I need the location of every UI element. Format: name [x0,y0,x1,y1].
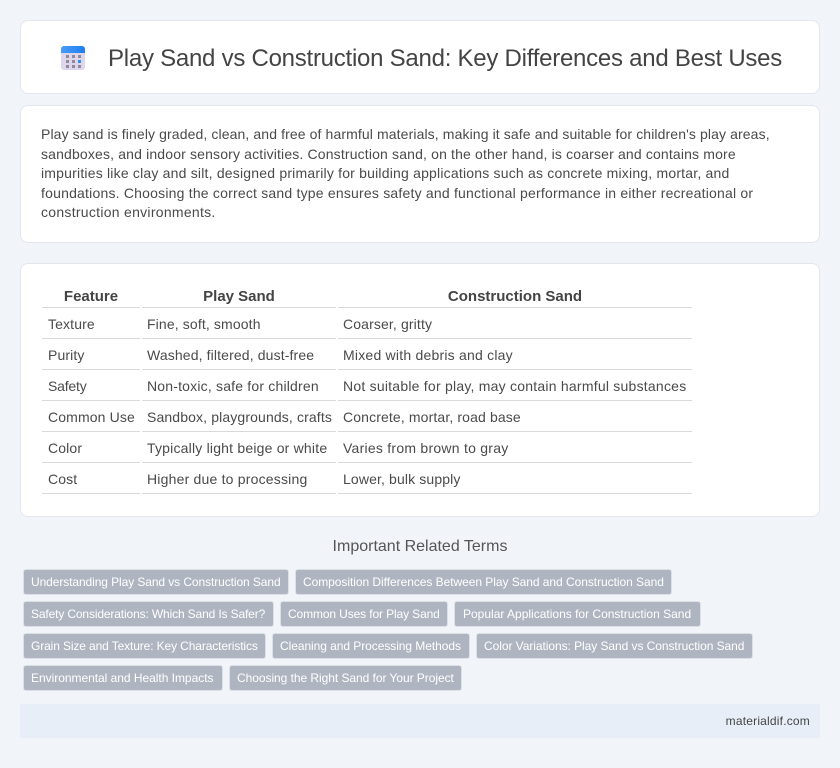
intro paragraph: impurities like clay and silt, designed primarily for building applications such as concrete mixing, mortar, and [41,165,730,181]
comparison table: Varies from brown to gray [343,440,508,456]
comparison table: Color [48,440,82,456]
comparison table: Sandbox, playgrounds, crafts [147,409,332,425]
comparison table [42,288,692,494]
title: Play Sand vs Construction Sand: Key Differences and Best Uses [108,45,782,72]
related terms tags: Common Uses for Play Sand [288,607,440,621]
related terms tags: Choosing the Right Sand for Your Project [237,671,454,685]
related terms tags: Understanding Play Sand vs Construction Sand [31,575,281,589]
related terms tags [23,569,753,691]
comparison table: Lower, bulk supply [343,471,461,487]
intro paragraph: sandboxes, and indoor sensory activities. Construction sand, on the other hand, is coarser and contains more [41,146,736,162]
related terms tags: Safety Considerations: Which Sand Is Safer? [31,607,265,621]
comparison table: Cost [48,471,77,487]
comparison table: Texture [48,316,95,332]
comparison table: Purity [48,347,85,363]
comparison table: Construction Sand [448,288,582,305]
icon: calendar [61,46,85,70]
comparison table: Mixed with debris and clay [343,347,513,363]
related terms tags: Grain Size and Texture: Key Characteristics [31,639,258,653]
comparison table: Concrete, mortar, road base [343,409,521,425]
comparison table: Fine, soft, smooth [147,316,261,332]
related terms tags: Popular Applications for Construction Sand [463,607,691,621]
related terms heading: Important Related Terms [333,538,507,555]
related terms tags: Color Variations: Play Sand vs Construction Sand [484,639,744,653]
comparison table: Washed, filtered, dust-free [147,347,314,363]
intro paragraph: foundations. Choosing the correct sand type ensures safety and functional performance in either recreational or [41,185,753,201]
related terms tags: Environmental and Health Impacts [31,671,213,685]
related terms tags: Composition Differences Between Play Sand and Construction Sand [303,575,664,589]
intro paragraph: construction environments. [41,204,216,220]
related terms tags: Cleaning and Processing Methods [280,639,461,653]
comparison table: Common Use [48,409,135,425]
comparison table: Feature [64,288,118,305]
comparison table: Safety [48,378,86,394]
intro paragraph: Play sand is finely graded, clean, and free of harmful materials, making it safe and suitable for children's play areas, [41,126,770,142]
table panel [20,263,820,517]
comparison table: Not suitable for play, may contain harmful substances [343,378,686,394]
header panel [20,20,820,94]
comparison table: Higher due to processing [147,471,307,487]
comparison table: Play Sand [203,288,275,305]
comparison table: Non-toxic, safe for children [147,378,319,394]
footer bar [20,704,820,738]
intro text panel [20,105,820,243]
footer credit: materialdif.com [726,714,810,728]
intro paragraph [41,126,770,220]
comparison table: Coarser, gritty [343,316,432,332]
comparison table: Typically light beige or white [147,440,327,456]
